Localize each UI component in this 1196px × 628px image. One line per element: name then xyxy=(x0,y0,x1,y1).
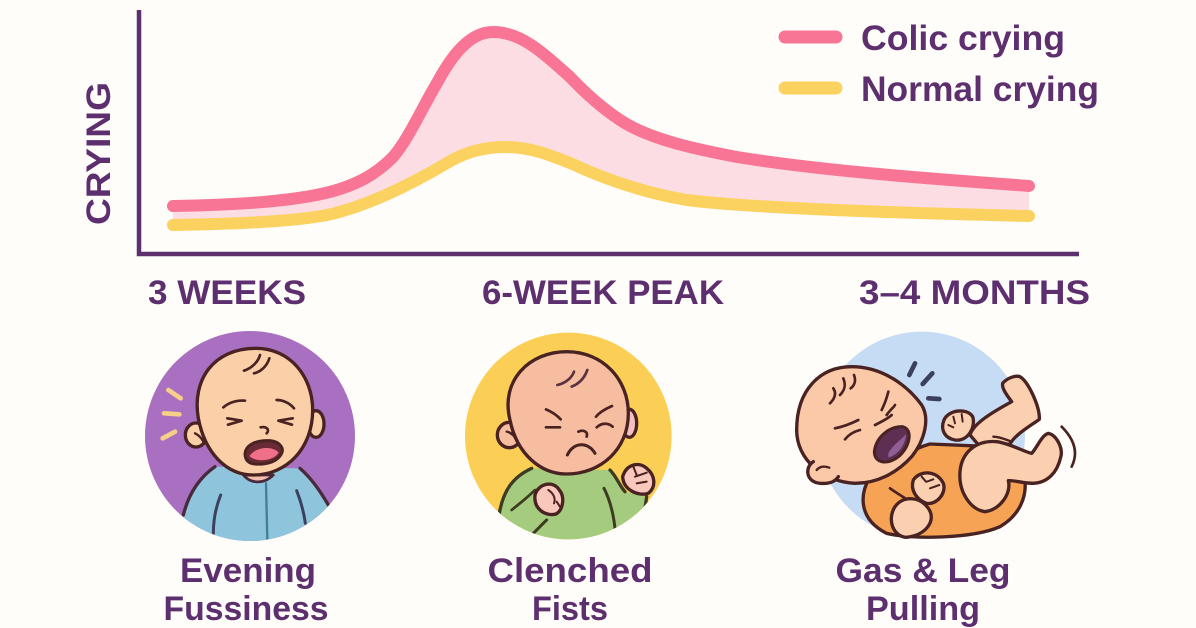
icon: baby evening fussiness xyxy=(145,331,355,553)
icon: baby clenched fists xyxy=(465,333,672,553)
crying curve chart xyxy=(80,10,1090,312)
x-axis label: 3-4 months: 3–4 MONTHS xyxy=(859,274,1090,312)
caption: evening fussiness xyxy=(164,552,328,628)
legend label: normal: Normal crying xyxy=(861,70,1099,109)
caption: clenched fists: Fists xyxy=(532,590,608,628)
axes xyxy=(139,10,1079,254)
caption: gas and leg pulling: Pulling xyxy=(866,590,980,628)
x-axis label: 6-week peak: 6-WEEK PEAK xyxy=(482,274,724,312)
legend swatch: colic xyxy=(785,30,836,44)
caption: clenched fists: Clenched xyxy=(488,552,652,590)
legend label: colic: Colic crying xyxy=(861,19,1065,58)
caption: evening fussiness: Evening xyxy=(180,552,316,590)
y-axis label: CRYING xyxy=(80,82,118,225)
caption: gas and leg pulling xyxy=(836,552,1010,628)
caption: clenched fists xyxy=(488,552,652,628)
caption: evening fussiness: Fussiness xyxy=(164,590,328,628)
legend swatch: normal xyxy=(785,82,836,94)
legend xyxy=(785,19,1099,109)
x-axis label: 3 weeks: 3 WEEKS xyxy=(148,274,306,312)
caption: gas and leg pulling: Gas & Leg xyxy=(836,552,1010,590)
icon: baby gas and leg pulling xyxy=(797,332,1075,538)
colic crying line xyxy=(173,32,1029,206)
normal crying line xyxy=(173,147,1029,225)
area between curves xyxy=(173,32,1029,225)
